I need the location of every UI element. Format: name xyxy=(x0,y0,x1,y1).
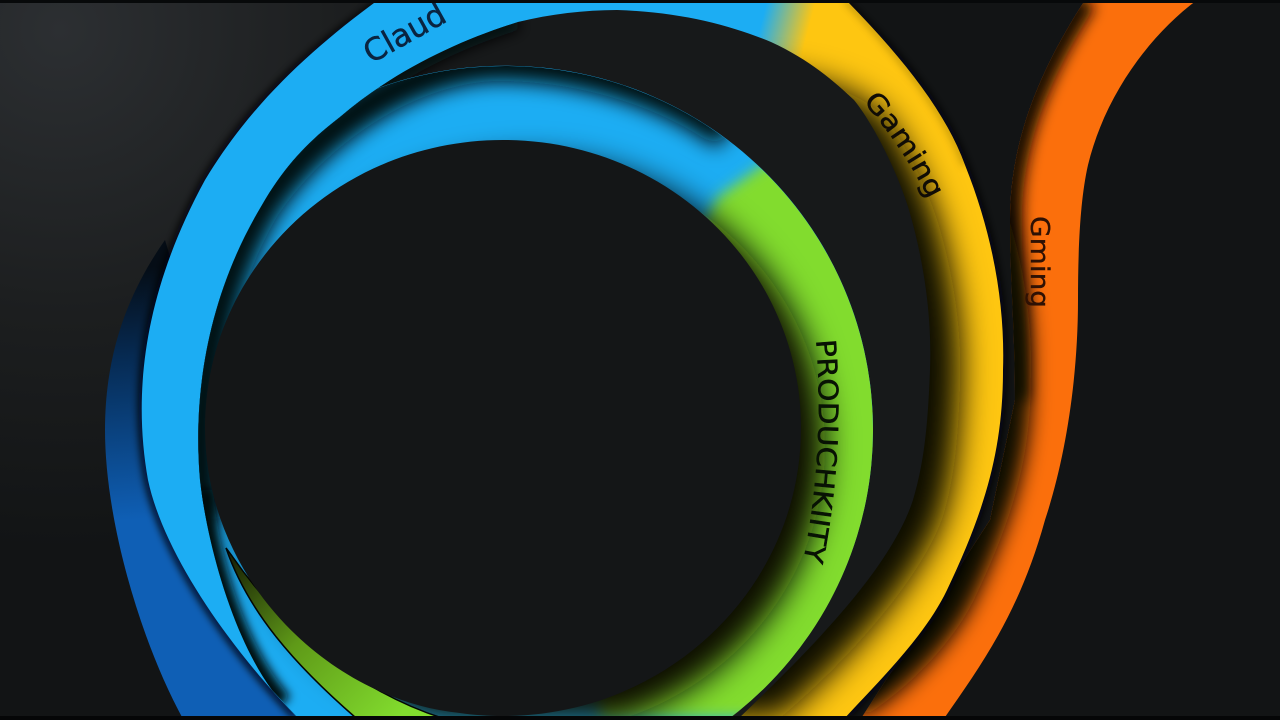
label: Gming on orange: Gming xyxy=(1025,217,1051,306)
dark gap between rings xyxy=(198,10,930,720)
shade on dark gap under outer ring xyxy=(198,22,518,480)
band: lower-left green sliver xyxy=(226,548,442,718)
label: Productivity on green: PRODUCHKIITY xyxy=(804,341,839,566)
band: orange gaming ribbon xyxy=(862,3,1193,716)
label: Gaming on yellow: Gaming xyxy=(868,94,941,198)
band: outer blue to yellow ring xyxy=(142,0,1003,720)
band: inner blue to green ring xyxy=(198,66,873,716)
center disc xyxy=(205,140,801,716)
band: dark blue crescent xyxy=(105,240,310,719)
